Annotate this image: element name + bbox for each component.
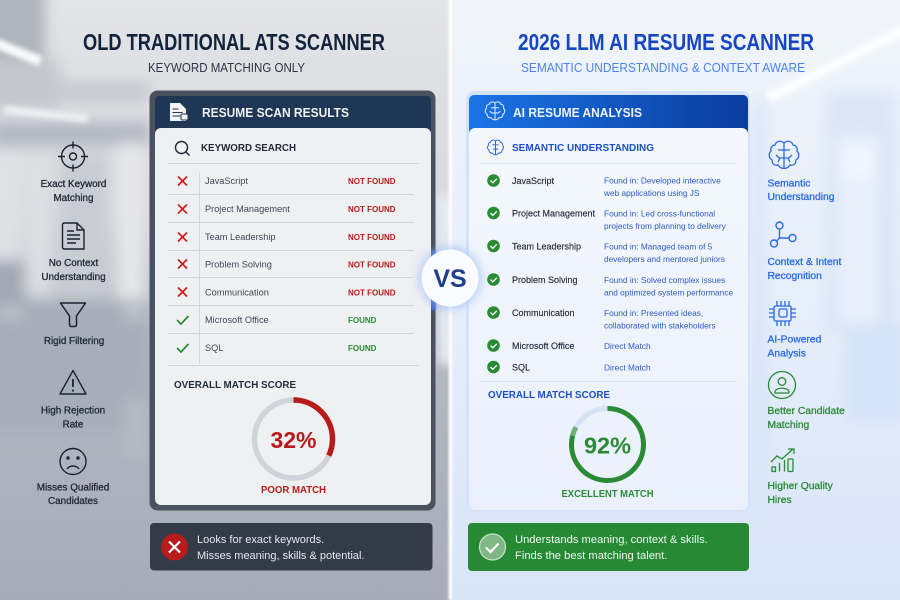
text: semantic understanding: Semantic: [768, 178, 810, 190]
row: Team Leadership: Found in: Managed team of 5: [604, 242, 713, 252]
row: Microsoft Office: [487, 339, 651, 352]
row: Communication: [487, 306, 716, 330]
row: Project Management: NOT FOUND: [348, 205, 396, 214]
panel frame: [150, 90, 436, 510]
semantic understanding heading: SEMANTIC UNDERSTANDING: [512, 142, 654, 154]
row: SQL: FOUND: [348, 344, 377, 353]
icon: growth chart: [771, 449, 794, 472]
row: Project Management: [487, 207, 727, 231]
row: SQL: SQL: [205, 343, 223, 353]
icon: small brain: [488, 140, 503, 155]
row: JavaScript: JavaScript: [512, 176, 555, 186]
text: high rejection rate: High Rejection: [41, 406, 105, 416]
row: Team Leadership: developers and mentored juniors: [604, 254, 725, 264]
icon: warning: [60, 370, 86, 394]
right title: 2026 LLM AI RESUME SCANNER: [518, 29, 814, 55]
row: Microsoft Office: [177, 315, 377, 325]
panel body: [469, 128, 748, 510]
text: rigid filtering: Rigid Filtering: [44, 336, 104, 347]
match rows: [487, 174, 734, 373]
text: semantic understanding: Understanding: [768, 192, 835, 203]
text: better candidate matching: Matching: [768, 420, 810, 431]
right background: [450, 0, 900, 600]
text: higher quality hires: Hires: [768, 495, 792, 506]
poor match label: POOR MATCH: [261, 484, 326, 496]
row: Problem Solving: Found in: Solved complex issues: [604, 275, 725, 285]
left subtitle: KEYWORD MATCHING ONLY: [148, 61, 306, 75]
row: Communication: Communication: [512, 308, 575, 318]
icon: check circle: [480, 534, 506, 560]
row: Problem Solving: Problem Solving: [205, 260, 272, 270]
icon: document: [62, 223, 84, 249]
left feature list: [37, 142, 109, 507]
row: SQL: SQL: [512, 362, 530, 372]
text: AI-powered analysis: Analysis: [768, 348, 806, 360]
row: JavaScript: web applications using JS: [603, 188, 700, 198]
row: Team Leadership: [178, 232, 396, 242]
icon: funnel: [60, 303, 86, 326]
icon: chip: [769, 301, 796, 326]
row: Communication: [178, 288, 396, 298]
summary text: Looks for exact keywords.: [197, 534, 324, 546]
text: context and intent recognition: Recognition: [768, 271, 822, 282]
header title: RESUME SCAN RESULTS: [202, 105, 349, 120]
score value: 92%: [584, 432, 631, 458]
icon: sad face: [60, 448, 86, 474]
score ring 92%: [572, 408, 644, 480]
row: Communication: Communication: [205, 288, 269, 298]
excellent match label: EXCELLENT MATCH: [562, 488, 654, 500]
row: Project Management: Project Management: [512, 208, 596, 218]
right subtitle: SEMANTIC UNDERSTANDING & CONTEXT AWARE: [521, 61, 805, 75]
text: exact keyword matching: Matching: [53, 193, 94, 204]
score ring 32%: [254, 400, 332, 478]
summary text: Finds the best matching talent.: [515, 550, 667, 562]
text: exact keyword matching: Exact Keyword: [41, 179, 106, 190]
keyword rows: [177, 176, 396, 353]
row: Problem Solving: Problem Solving: [512, 275, 578, 285]
row: Microsoft Office: FOUND: [348, 316, 377, 325]
text: misses qualified candidates: Misses Qualified: [37, 482, 109, 494]
icon: brain: [769, 141, 799, 168]
score value: 32%: [270, 427, 317, 453]
row: SQL: Direct Match: [604, 362, 651, 372]
left title: OLD TRADITIONAL ATS SCANNER: [83, 29, 385, 55]
left background: [0, 0, 450, 600]
panel: resume scan results: [150, 90, 436, 510]
text: high rejection rate: Rate: [63, 420, 84, 430]
row: JavaScript: [178, 176, 396, 186]
icon: brain: [485, 102, 505, 120]
keyword search heading: KEYWORD SEARCH: [201, 142, 296, 154]
centre divider glow: [438, 0, 452, 600]
summary text: Misses meaning, skills & potential.: [197, 550, 365, 562]
row: Team Leadership: Team Leadership: [205, 232, 275, 242]
row: Project Management: Found in: Led cross-functional: [604, 208, 715, 218]
row: Team Leadership: NOT FOUND: [348, 233, 396, 242]
text: context and intent recognition: Context & Intent: [768, 257, 841, 268]
icon: magnifier: [176, 142, 190, 156]
row: JavaScript: NOT FOUND: [348, 177, 396, 186]
icon: red cross: [161, 534, 188, 560]
text: higher quality hires: Higher Quality: [768, 481, 834, 492]
panel header: [155, 96, 431, 136]
row: Microsoft Office: Microsoft Office: [205, 315, 269, 325]
row: Microsoft Office: Microsoft Office: [512, 341, 574, 351]
overall match score heading: OVERALL MATCH SCORE: [174, 379, 296, 391]
row: Problem Solving: NOT FOUND: [348, 260, 396, 269]
row: Microsoft Office: Direct Match: [604, 341, 651, 351]
overall match score heading: OVERALL MATCH SCORE: [488, 389, 610, 401]
row: Project Management: projects from planning to delivery: [604, 221, 727, 231]
row: JavaScript: [487, 174, 721, 198]
header title: AI RESUME ANALYSIS: [513, 105, 642, 120]
callout: left summary: [150, 523, 432, 570]
panel body: [155, 128, 431, 505]
VS badge: VS: [433, 265, 467, 293]
row: Team Leadership: Team Leadership: [512, 242, 581, 252]
text: misses qualified candidates: Candidates: [48, 496, 98, 507]
row: Project Management: Project Management: [205, 204, 290, 214]
VS badge: [419, 247, 481, 309]
panel: AI resume analysis: [466, 91, 750, 511]
row: Problem Solving: [487, 273, 734, 298]
text: AI-powered analysis: AI-Powered: [768, 334, 822, 346]
row: Team Leadership: [487, 240, 725, 264]
icon: target: [58, 142, 88, 172]
panel header: [469, 95, 748, 140]
frame blue glow: [431, 250, 436, 310]
icon: document: [170, 103, 188, 121]
text: no context understanding: Understanding: [41, 272, 106, 283]
row: JavaScript: JavaScript: [205, 176, 248, 186]
summary text: Understands meaning, context & skills.: [515, 534, 708, 546]
right feature list: [768, 141, 845, 506]
row: Communication: Found in: Presented ideas,: [604, 308, 703, 318]
text: no context understanding: No Context: [49, 258, 98, 269]
row: Project Management: [178, 204, 396, 214]
row: Communication: collaborated with stakeholders: [604, 320, 716, 330]
callout: right summary: [468, 523, 749, 571]
text: better candidate matching: Better Candidate: [768, 406, 845, 417]
row: Communication: NOT FOUND: [348, 288, 396, 297]
row: SQL: [487, 361, 651, 373]
icon: network: [770, 222, 796, 247]
row: SQL: [177, 343, 377, 353]
row: JavaScript: Found in: Developed interactive: [604, 176, 721, 186]
panel glow: [466, 91, 750, 511]
icon: person circle: [768, 372, 796, 398]
row: Problem Solving: [178, 260, 396, 270]
row: Problem Solving: and optimized system performance: [604, 288, 734, 298]
